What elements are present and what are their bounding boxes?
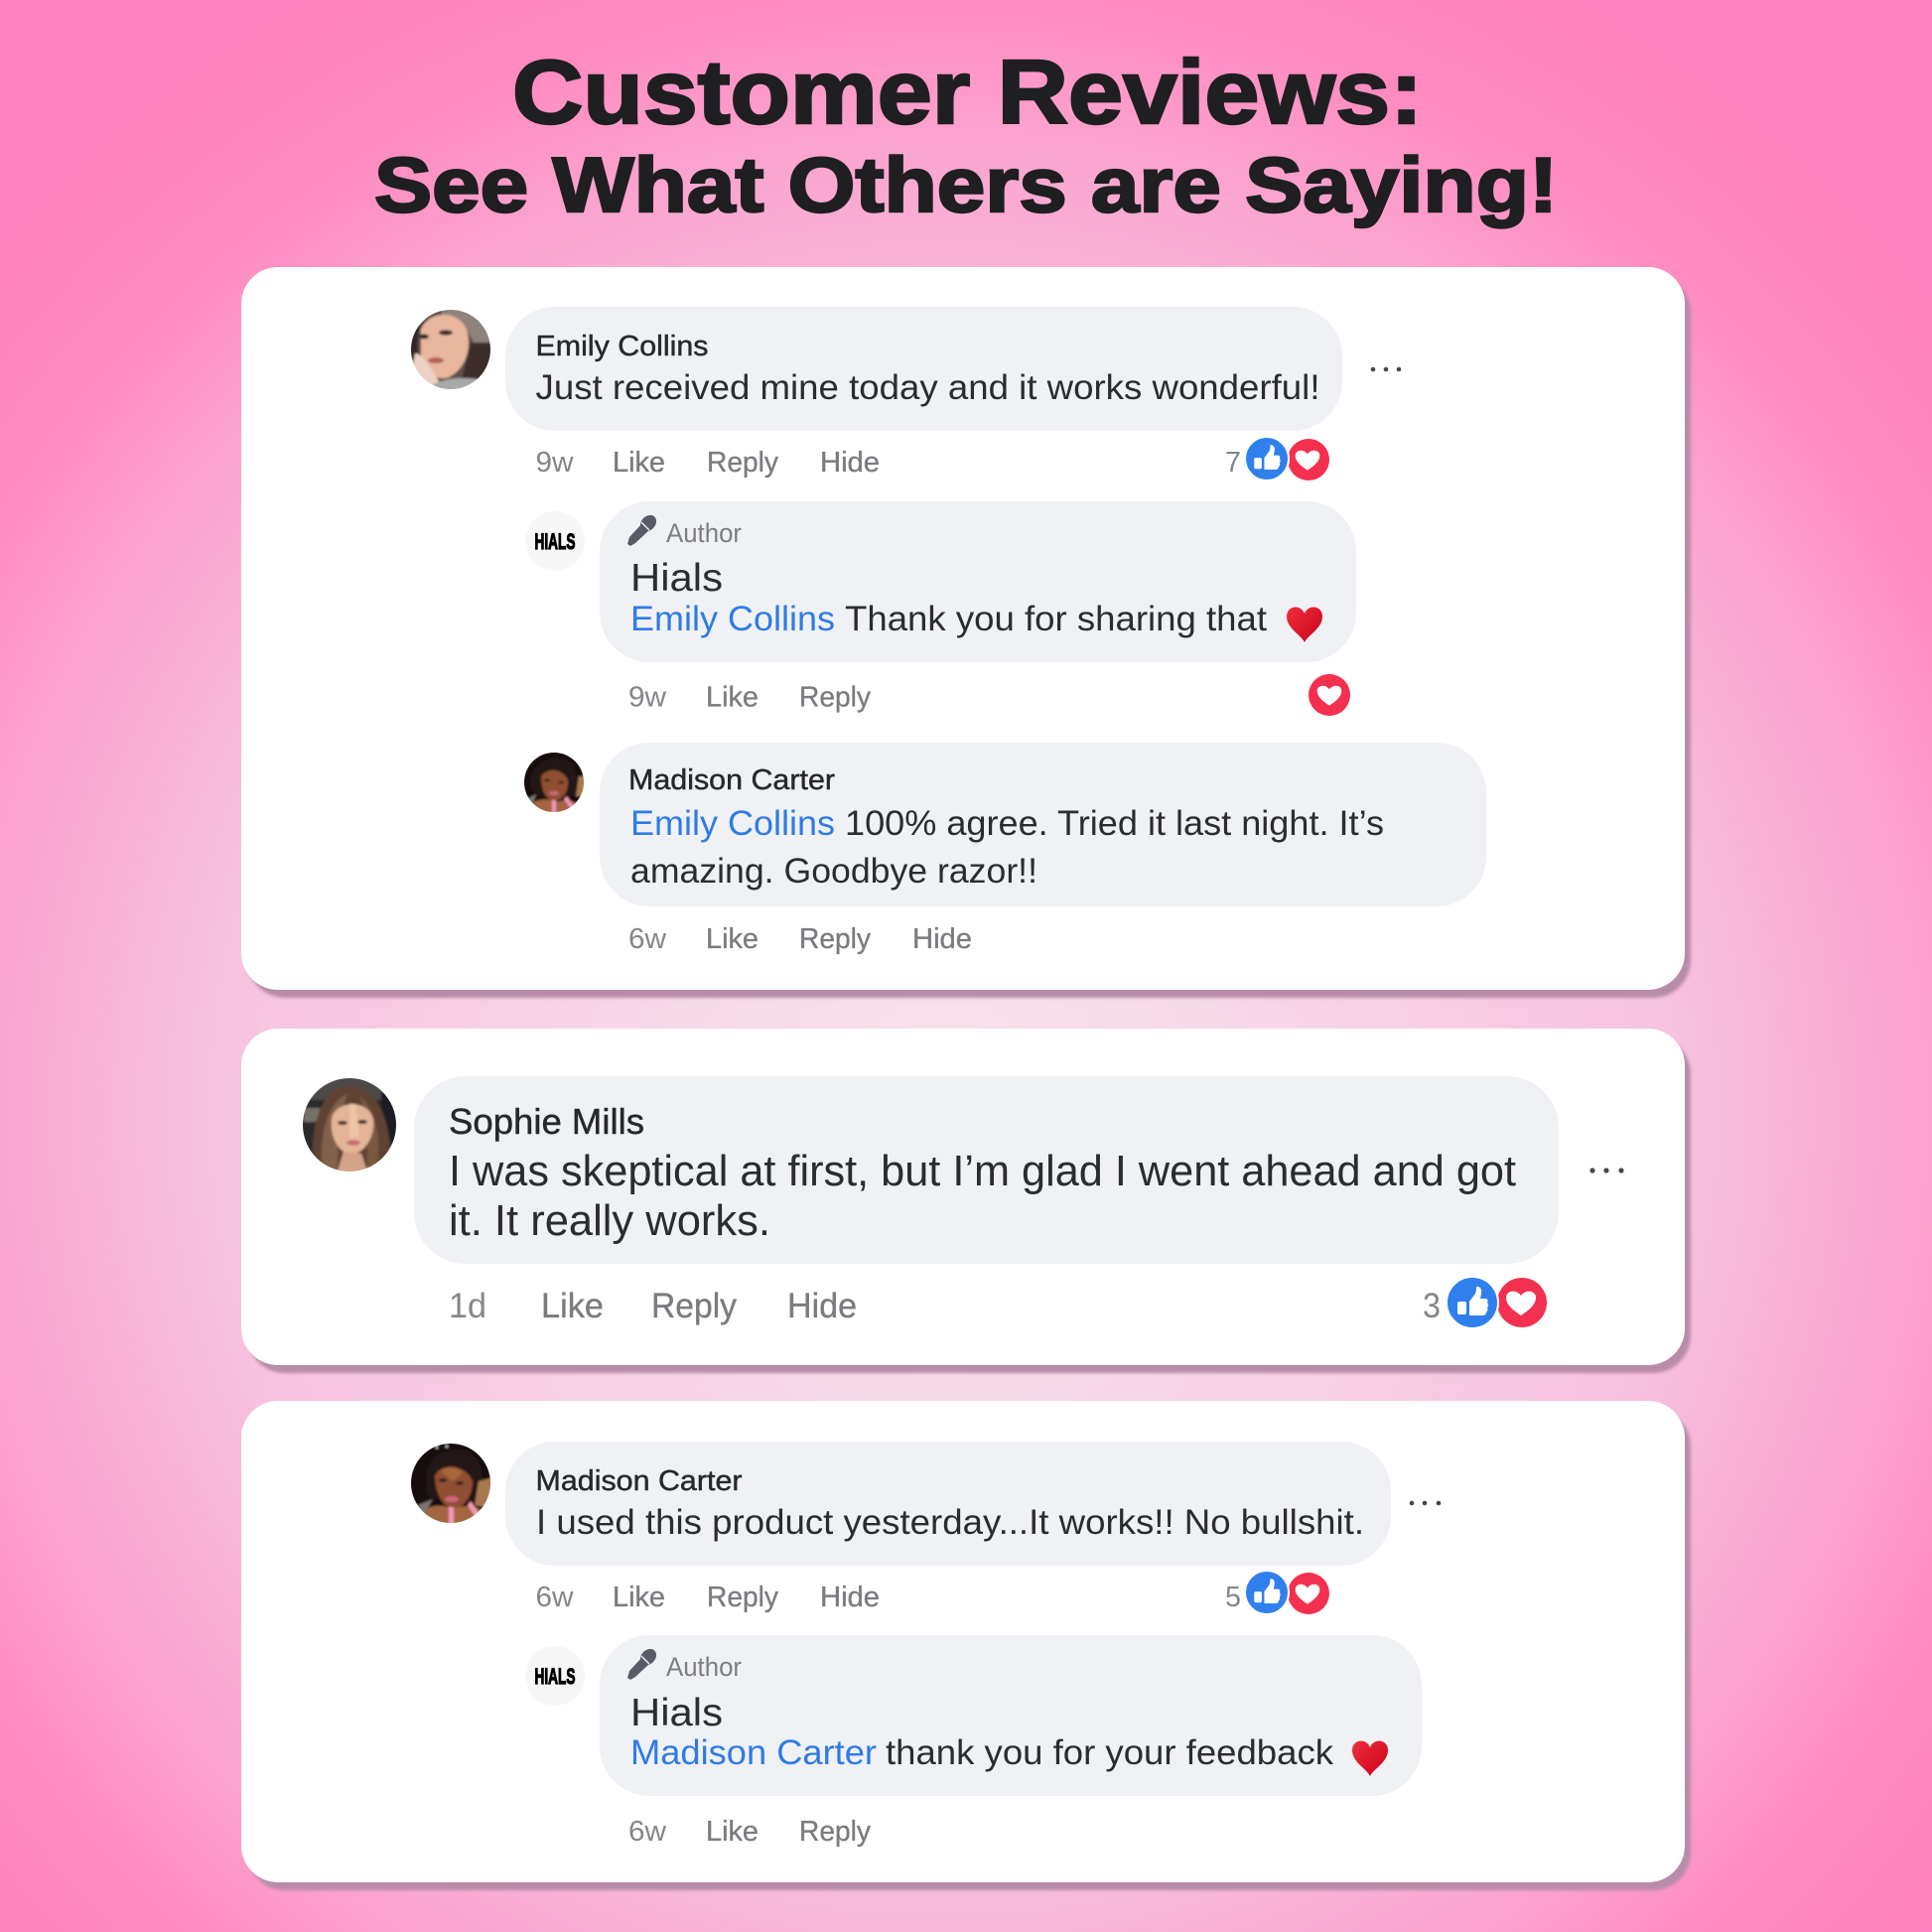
reply actions: Hide [912, 923, 972, 955]
reply actions: Reply [799, 923, 871, 955]
reply bubble: Hials author: Author [666, 518, 742, 548]
reply bubble: Madison Carter: amazing. Goodbye razor!! [630, 852, 1037, 891]
reply actions [628, 923, 972, 955]
avatar: Sophie Mills [303, 1078, 396, 1172]
reply bubble: Hials author: Madison Carter [630, 1733, 877, 1772]
reply actions: Like [706, 1816, 759, 1848]
comment bubble: Madison Carter: Madison Carter [536, 1465, 743, 1497]
reactions: 3: 3 [1423, 1287, 1441, 1325]
comment bubble: Emily Collins: Emily Collins [536, 331, 709, 362]
reply bubble: Hials author: Hials [630, 557, 723, 600]
comment actions [536, 1582, 880, 1613]
avatar: Hials logo: HIALS [534, 1664, 576, 1689]
reply bubble: Madison Carter: Madison Carter [628, 764, 835, 796]
comment bubble: Sophie Mills: Sophie Mills [449, 1101, 644, 1142]
card background [241, 1029, 1691, 1373]
reply bubble: Hials author [600, 1635, 1422, 1796]
reactions: 5: 5 [1225, 1582, 1241, 1613]
reactions: 7: 7 [1225, 447, 1241, 479]
panel: review Sophie Mills [241, 1029, 1691, 1373]
avatar: Madison Carter [411, 1444, 490, 1523]
reply bubble: Hials author: Emily Collins [630, 600, 835, 638]
reply actions: Reply [799, 1816, 871, 1848]
comment actions: Hide [820, 1582, 880, 1613]
title: See What Others are Saying! [374, 141, 1558, 228]
avatar: Hials logo [525, 511, 585, 571]
avatar: Hials logo [525, 1646, 585, 1706]
comment bubble: Sophie Mills [414, 1076, 1559, 1264]
reply bubble: Hials author: thank you for your feedback [886, 1733, 1334, 1772]
reply actions [628, 681, 871, 713]
panel: review thread Emily Collins [241, 267, 1691, 998]
comment actions: Like [613, 447, 665, 479]
reply bubble: Madison Carter: 100% agree. Tried it last night. It’s [845, 804, 1384, 843]
reaction: heart [1309, 674, 1350, 716]
comment bubble: Sophie Mills: I was skeptical at first, but I’m glad I went ahead and got [449, 1147, 1516, 1195]
reactions: 5 [1225, 1571, 1329, 1614]
more options [1410, 1501, 1441, 1505]
card background [241, 1401, 1691, 1890]
reply actions: Like [706, 923, 759, 955]
reply bubble: Hials author: Hials [630, 1692, 723, 1734]
reply actions: Like [706, 681, 759, 713]
more options [1589, 1168, 1624, 1173]
comment actions: Hide [787, 1287, 857, 1325]
title: Customer Reviews: [512, 43, 1423, 143]
avatar: Hials logo: HIALS [534, 529, 576, 554]
comment actions: Reply [707, 447, 778, 479]
reactions: 7 [1225, 437, 1329, 481]
panel: review thread Madison Carter [241, 1401, 1691, 1890]
reply bubble: Madison Carter: Emily Collins [630, 804, 835, 843]
avatar: Emily Collins [411, 310, 490, 389]
comment bubble: Emily Collins [505, 307, 1342, 431]
comment actions [449, 1287, 857, 1325]
comment bubble: Emily Collins: Just received mine today and it works wonderful! [536, 368, 1320, 407]
icon: red heart [1287, 608, 1322, 642]
comment actions: Hide [820, 447, 880, 479]
reply actions: 6w [628, 923, 667, 955]
reply actions: 9w [628, 681, 667, 713]
card background [241, 267, 1691, 998]
title [374, 43, 1558, 228]
icon: red heart [1352, 1741, 1388, 1776]
reply bubble: Madison Carter [600, 743, 1486, 906]
avatar: Madison Carter small [524, 753, 584, 812]
comment actions: 9w [536, 447, 575, 479]
comment bubble: Sophie Mills: it. It really works. [449, 1196, 770, 1245]
comment actions: Reply [707, 1582, 778, 1613]
reply bubble: Hials author: Thank you for sharing that [845, 600, 1267, 638]
comment actions: Like [541, 1287, 604, 1325]
reply actions: 6w [628, 1816, 667, 1848]
comment bubble: Madison Carter: I used this product yesterday...It works!! No bullshit. [536, 1503, 1364, 1542]
more options [1371, 367, 1401, 371]
comment actions: 1d [449, 1287, 486, 1325]
reply actions: Reply [799, 681, 871, 713]
comment bubble: Madison Carter [505, 1442, 1391, 1566]
reply bubble: Hials author [600, 501, 1356, 662]
icon: author microphone [627, 1646, 659, 1680]
comment actions [536, 447, 880, 479]
comment actions: 6w [536, 1582, 575, 1613]
reply bubble: Hials author: Author [666, 1652, 742, 1682]
icon: author microphone [627, 512, 659, 546]
reactions: 3 [1423, 1277, 1547, 1328]
comment actions: Reply [651, 1287, 737, 1325]
reply actions [628, 1816, 871, 1848]
comment actions: Like [613, 1582, 665, 1613]
